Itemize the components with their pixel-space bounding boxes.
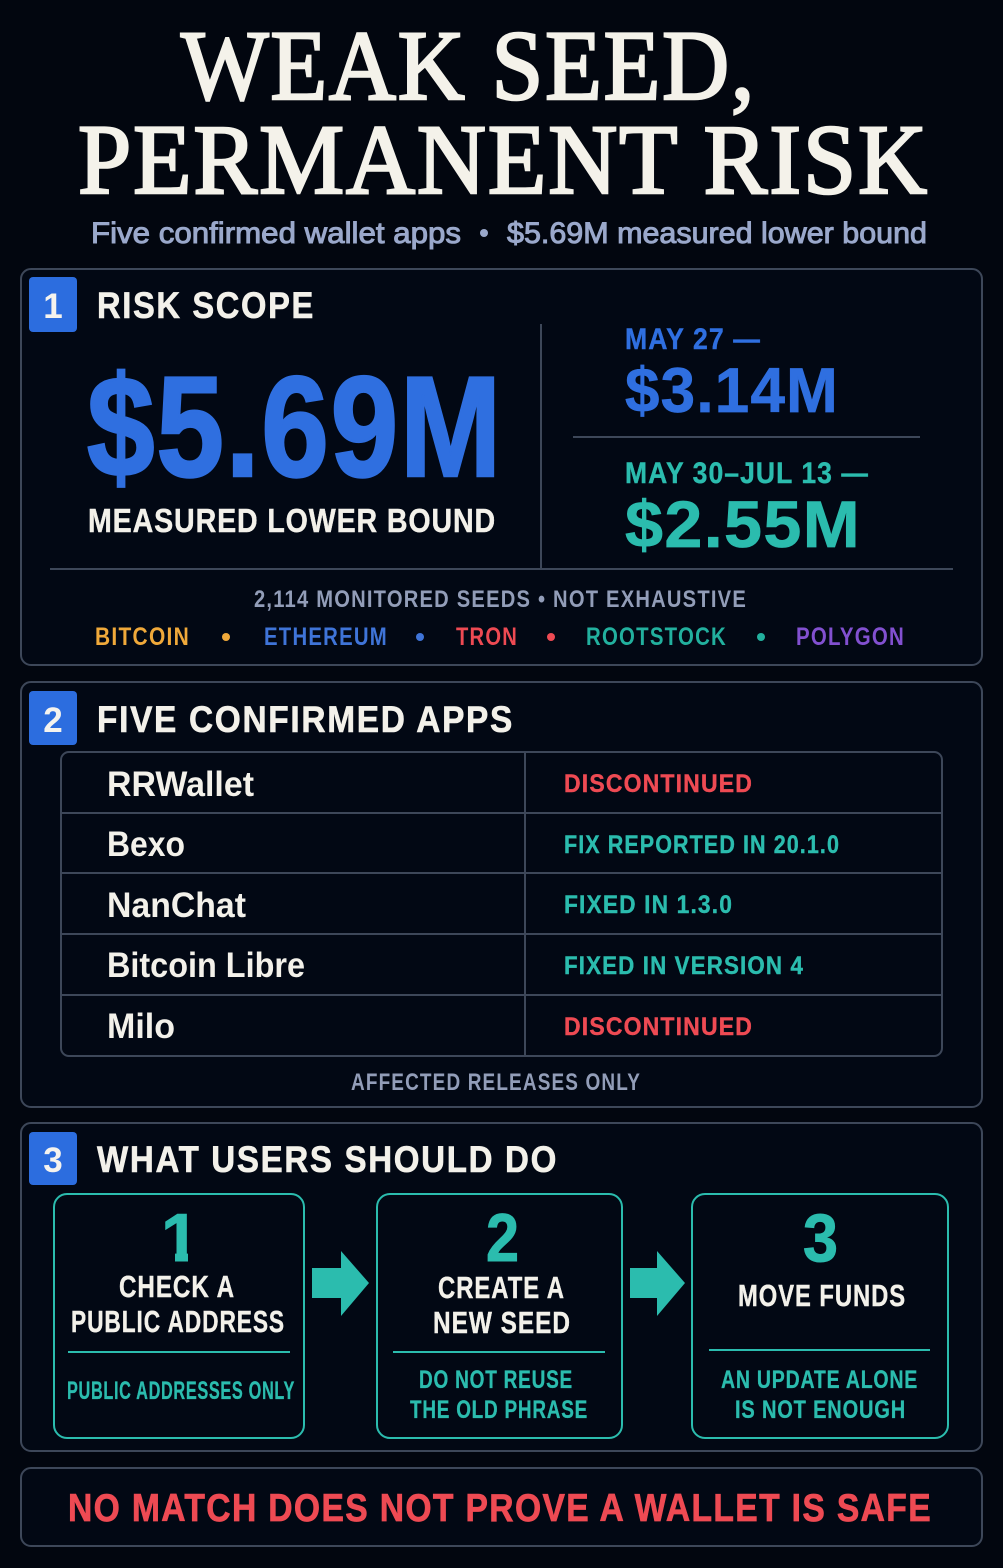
stat label: MEASURED LOWER BOUND [88, 502, 496, 539]
step card 1 [54, 1194, 304, 1438]
step card 3 [692, 1194, 948, 1438]
row: bexo: FIX REPORTED IN 20.1.0 [564, 831, 840, 859]
step card 2: THE OLD PHRASE [410, 1396, 588, 1424]
chain list: TRON [456, 623, 518, 651]
stat: 3.14M: $3.14M [625, 356, 839, 426]
panel: five confirmed apps [21, 682, 982, 1107]
monitored seeds note: 2,114 MONITORED SEEDS • NOT EXHAUSTIVE [254, 586, 747, 613]
heading: what users should do: WHAT USERS SHOULD DO [97, 1139, 558, 1180]
subtitle: $5.69M measured lower bound [507, 217, 927, 250]
title: PERMANENT RISK [78, 104, 929, 215]
arrow 2 to 3 [630, 1251, 685, 1316]
panel: risk scope [21, 269, 982, 665]
row: rrwallet: RRWallet [107, 765, 254, 804]
step card 2: CREATE A [438, 1270, 565, 1305]
row: bitcoin libre: FIXED IN VERSION 4 [564, 952, 804, 980]
row: nanchat: NanChat [107, 886, 246, 925]
step card 3: 3 [803, 1200, 838, 1276]
step card 3: IS NOT ENOUGH [735, 1396, 906, 1424]
heading: risk scope: RISK SCOPE [97, 285, 315, 326]
chain list [95, 623, 905, 651]
icon: section badge 1: 1 [43, 287, 63, 326]
step card 1: CHECK A [119, 1269, 235, 1304]
chain list: ETHEREUM [264, 623, 388, 651]
heading: five confirmed apps: FIVE CONFIRMED APPS [97, 699, 514, 740]
row: bitcoin libre: Bitcoin Libre [107, 946, 305, 985]
row: milo: DISCONTINUED [564, 1013, 753, 1041]
icon: section badge 2 [29, 691, 77, 745]
icon: section badge 3: 3 [43, 1141, 63, 1180]
subtitle: Five confirmed wallet apps [91, 217, 461, 250]
step card 1: PUBLIC ADDRESS [71, 1304, 285, 1339]
chain list: ROOTSTOCK [586, 623, 727, 651]
row: nanchat: FIXED IN 1.3.0 [564, 891, 733, 919]
title [78, 10, 929, 215]
icon: section badge 1 [29, 277, 77, 332]
icon: section badge 3 [29, 1132, 77, 1185]
step card 2: NEW SEED [433, 1305, 571, 1340]
step card 2 [377, 1194, 622, 1438]
step card 3: MOVE FUNDS [738, 1278, 906, 1313]
chain list: POLYGON [796, 623, 905, 651]
table note: AFFECTED RELEASES ONLY [351, 1069, 641, 1096]
chain list: BITCOIN [95, 623, 190, 651]
arrow 1 to 2 [312, 1251, 369, 1316]
row: nanchat [107, 886, 733, 925]
step card 2: DO NOT REUSE [419, 1366, 573, 1394]
row: milo: Milo [107, 1007, 175, 1046]
big stat: total: $5.69M [87, 348, 503, 507]
subtitle [91, 217, 927, 250]
row: bexo: Bexo [107, 825, 185, 864]
step card 2: 2 [486, 1200, 519, 1276]
icon: section badge 2: 2 [43, 701, 63, 740]
row: rrwallet [107, 765, 753, 804]
panel: warning banner [21, 1468, 982, 1546]
date label: may 27: MAY 27 — [625, 323, 761, 356]
step card 1: PUBLIC ADDRESSES ONLY [67, 1377, 295, 1405]
row: bexo [107, 825, 840, 864]
row: bitcoin libre [107, 946, 804, 985]
table of apps [61, 752, 942, 1056]
row: rrwallet: DISCONTINUED [564, 770, 753, 798]
step card 3: AN UPDATE ALONE [721, 1366, 918, 1394]
date label: may 30 to jul 13: MAY 30–JUL 13 — [625, 457, 869, 490]
step card 1: 1 [161, 1200, 199, 1276]
title: WEAK SEED, [181, 10, 756, 121]
panel: what users should do [21, 1123, 982, 1451]
stat: 2.55M: $2.55M [625, 487, 861, 561]
row: milo [107, 1007, 753, 1046]
